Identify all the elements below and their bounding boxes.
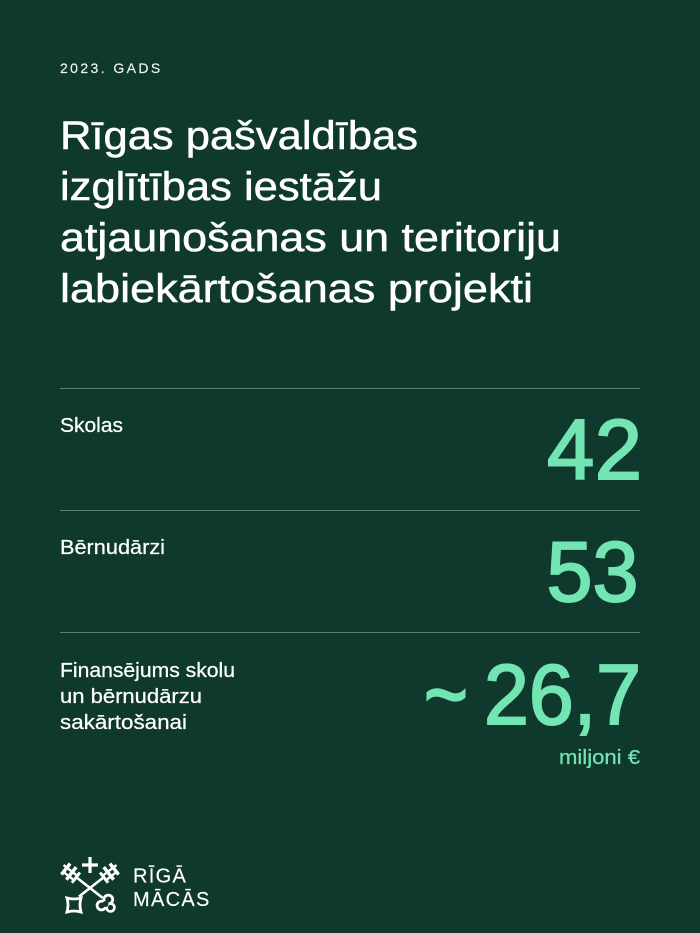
row: schools bbox=[60, 403, 643, 498]
row: funding: un bērnudārzu bbox=[60, 686, 202, 708]
title: atjaunošanas un teritoriju bbox=[60, 216, 561, 260]
row: funding bbox=[60, 645, 641, 769]
logo bbox=[57, 857, 211, 913]
row: funding: sakārtošanai bbox=[60, 712, 187, 734]
row: schools: 42 bbox=[547, 403, 643, 498]
title: labiekārtošanas projekti bbox=[60, 267, 533, 311]
row: kindergartens: 53 bbox=[546, 525, 638, 620]
row: schools: Skolas bbox=[60, 415, 123, 437]
icon: crossed keys bbox=[57, 857, 123, 913]
wordmark: RĪGĀ bbox=[133, 864, 187, 888]
row: funding: 26,7 bbox=[484, 648, 641, 743]
year label: 2023. GADS bbox=[60, 60, 163, 76]
wordmark bbox=[133, 864, 211, 911]
row: funding: Finansējums skolu bbox=[60, 660, 235, 682]
row: funding: miljoni € bbox=[559, 747, 640, 769]
row: kindergartens bbox=[60, 525, 638, 620]
title: Rīgas pašvaldības bbox=[60, 114, 418, 158]
title bbox=[60, 114, 561, 311]
title: izglītības iestāžu bbox=[60, 165, 382, 209]
row: kindergartens: Bērnudārzi bbox=[60, 537, 165, 559]
row: funding: ~ bbox=[424, 645, 468, 745]
wordmark: MĀCĀS bbox=[133, 888, 211, 911]
